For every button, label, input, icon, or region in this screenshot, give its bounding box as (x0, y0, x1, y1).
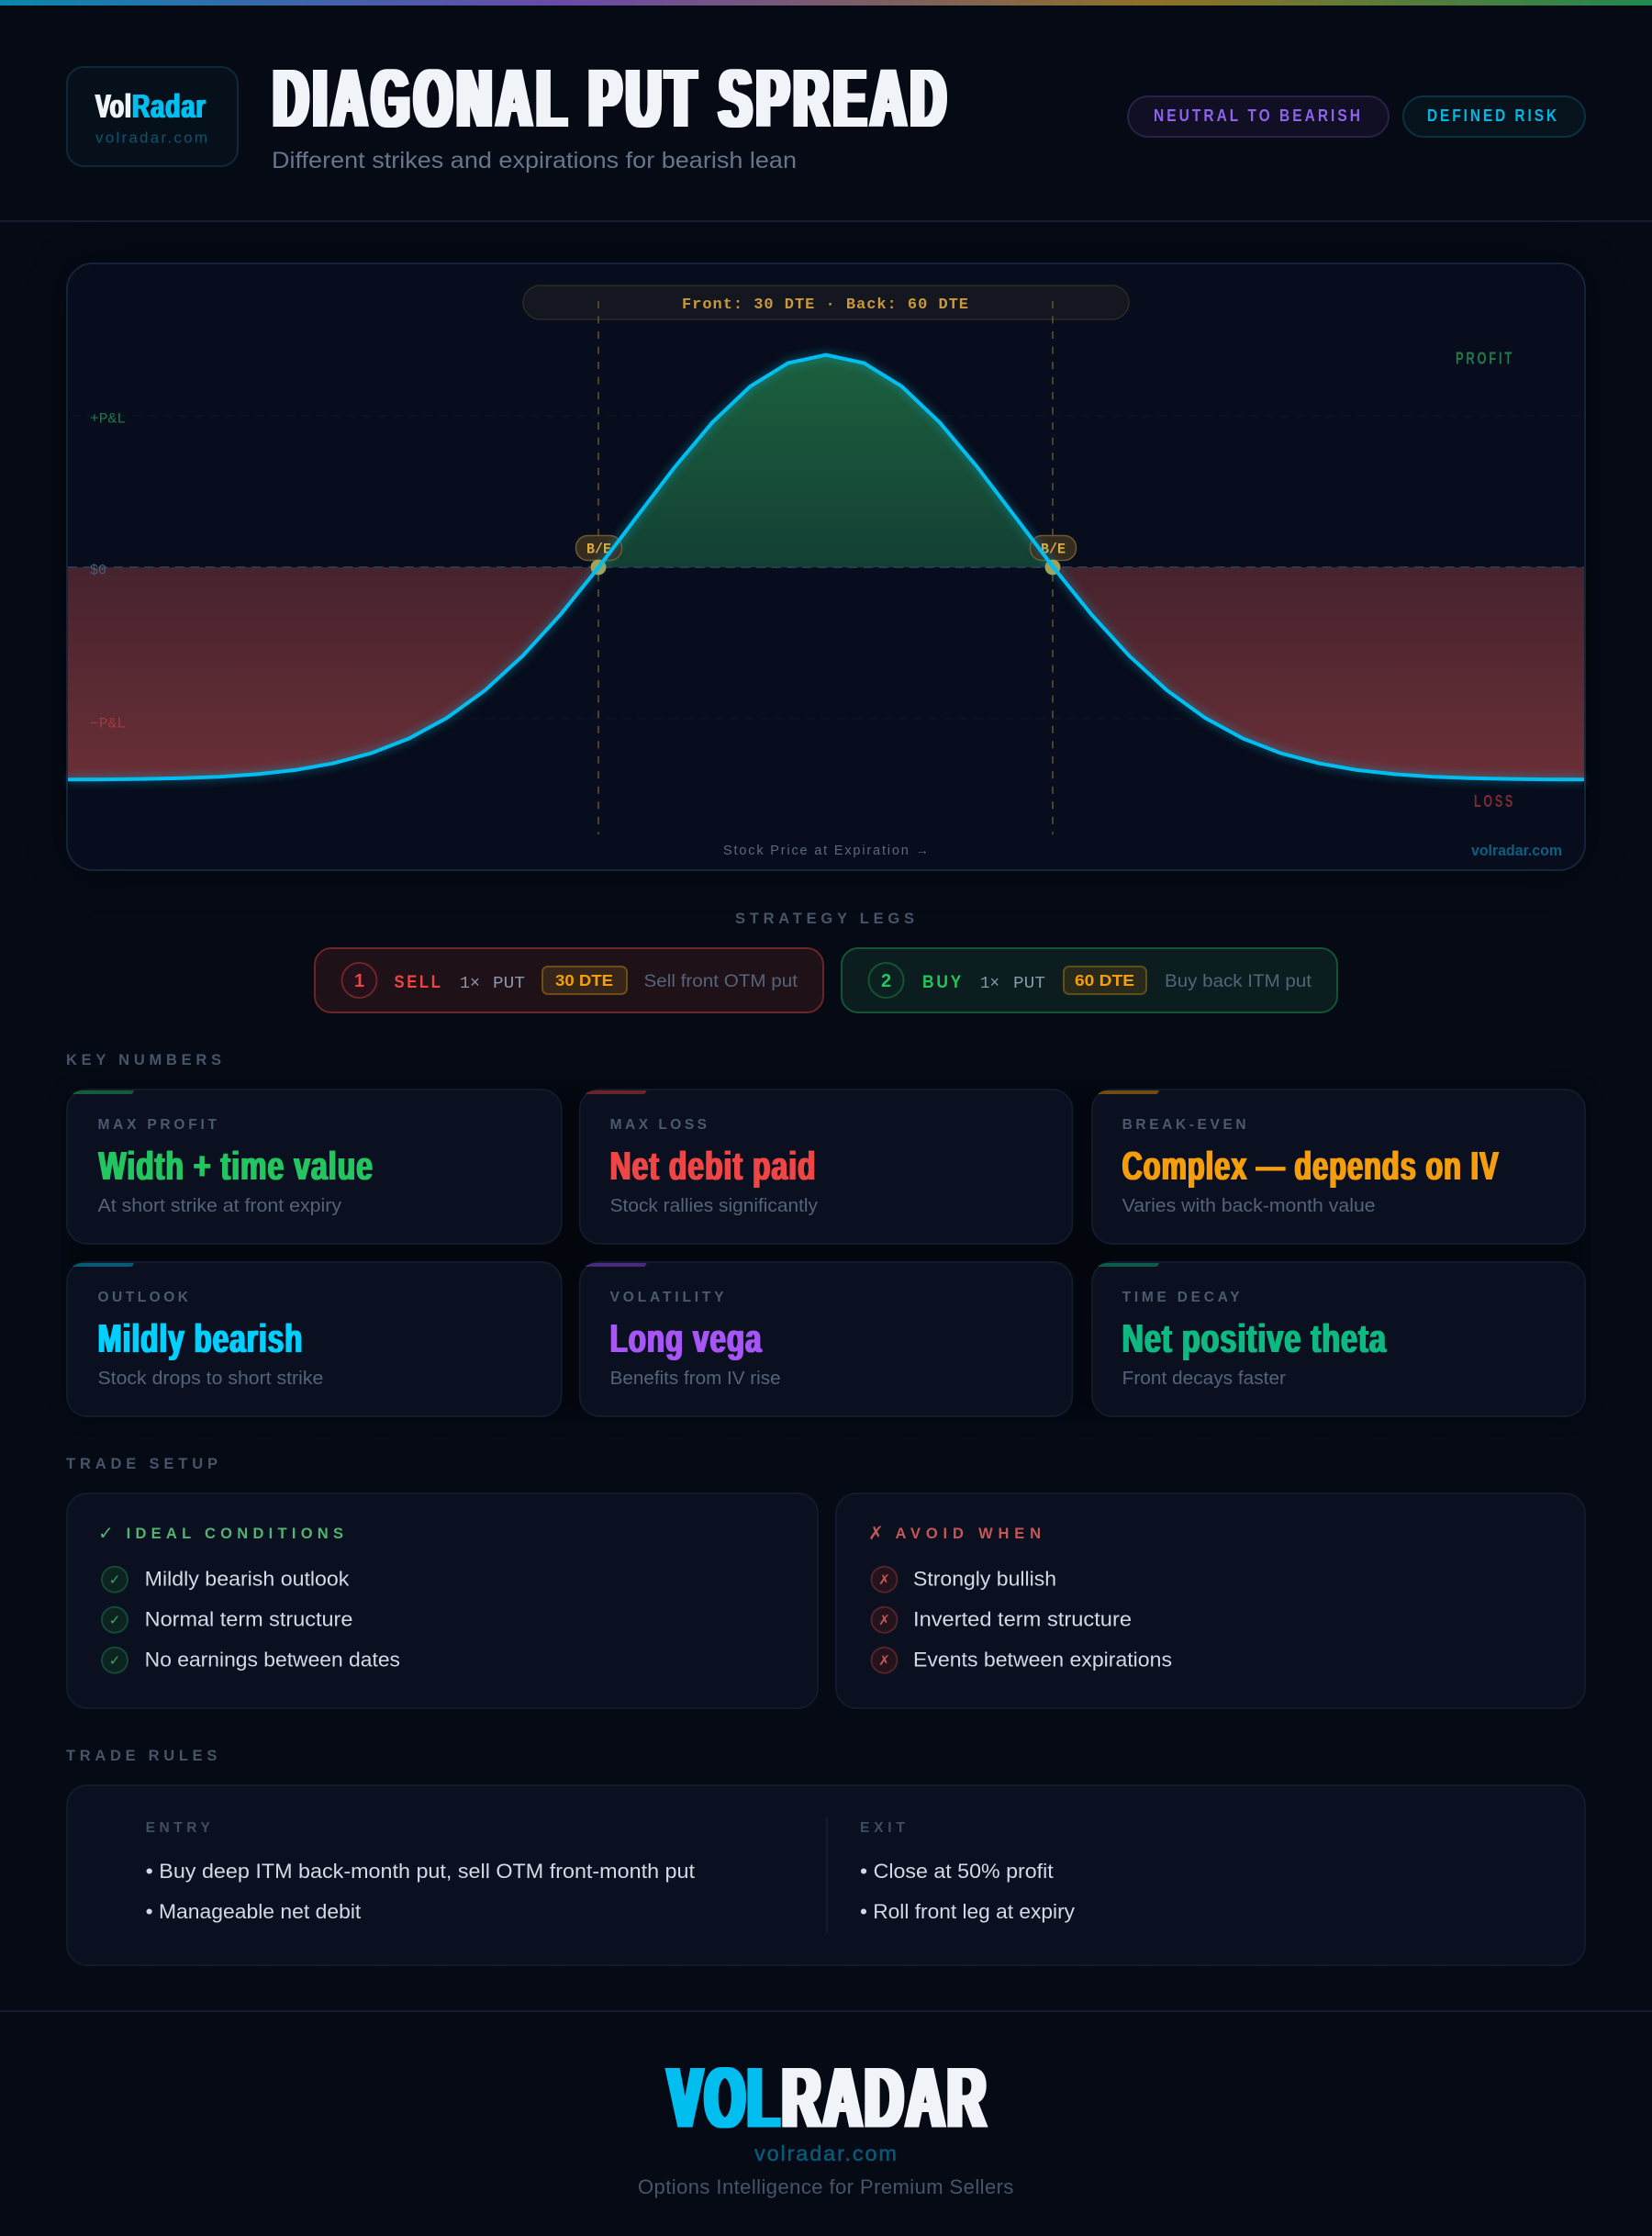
loss label: LOSS (1474, 791, 1515, 811)
DTE badge (1064, 967, 1146, 994)
logo box (67, 67, 238, 166)
label: MAX PROFIT (97, 1117, 218, 1133)
badge: neutral to bearish (1128, 96, 1389, 137)
leg note: Buy back ITM put (1165, 972, 1312, 991)
panel heading (868, 1522, 1041, 1544)
badge: neutral to bearish: NEUTRAL TO BEARISH (1154, 106, 1363, 125)
leg 1: sell (315, 948, 823, 1012)
logo box: Radar (132, 87, 206, 125)
panel heading: AVOID WHEN (896, 1526, 1041, 1542)
value: Net debit paid (610, 1145, 817, 1189)
entry rules: • Manageable net debit (146, 1900, 361, 1923)
break-even label left: B/E (586, 542, 611, 558)
DTE badge (542, 967, 627, 994)
panel: avoid when (836, 1493, 1585, 1708)
DTE badge: 30 DTE (555, 971, 613, 989)
exit rules: • Roll front leg at expiry (860, 1900, 1075, 1923)
note: Benefits from IV rise (610, 1369, 781, 1389)
note: At short strike at front expiry (97, 1196, 341, 1216)
chart watermark: volradar.com (1471, 843, 1562, 859)
label: VOLATILITY (610, 1290, 724, 1305)
panel: trade rules (67, 1785, 1585, 1965)
card: time decay (1092, 1262, 1585, 1416)
exit rules (860, 1820, 1075, 1923)
badge: defined risk (1403, 96, 1585, 137)
heading: trade rules: TRADE RULES (66, 1748, 217, 1764)
logo box: Vol (95, 87, 132, 125)
label: TIME DECAY (1122, 1290, 1240, 1305)
axis label: negative P&L: −P&L (90, 716, 126, 732)
panel: ideal conditions (67, 1493, 818, 1708)
quantity and type (460, 974, 525, 993)
card: break-even (1092, 1090, 1585, 1244)
value: Width + time value (99, 1145, 374, 1189)
subtitle: Different strikes and expirations for bearish lean (272, 148, 797, 173)
item: events between expirations: Events between expirations (913, 1649, 1172, 1671)
note: Varies with back-month value (1122, 1196, 1376, 1216)
exit rules: • Close at 50% profit (860, 1860, 1054, 1883)
item: no earnings between dates: No earnings between dates (145, 1649, 400, 1671)
profit area (598, 355, 1054, 567)
footer url: volradar.com (754, 2141, 897, 2165)
item: mildly bearish outlook: ✓ (109, 1571, 120, 1588)
item: inverted term structure: Inverted term structure (913, 1608, 1132, 1630)
item: strongly bullish: Strongly bullish (913, 1568, 1056, 1590)
axis label: positive P&L: +P&L (90, 411, 126, 428)
card: max loss (580, 1090, 1072, 1244)
loss area left (68, 567, 598, 779)
heading: trade setup: TRADE SETUP (66, 1456, 218, 1472)
item: normal term structure: ✓ (109, 1612, 120, 1628)
item: events between expirations: ✗ (878, 1652, 890, 1669)
value: Mildly bearish (97, 1317, 303, 1361)
footer tagline: Options Intelligence for Premium Sellers (638, 2175, 1013, 2198)
item: inverted term structure: ✗ (878, 1612, 890, 1628)
item: strongly bullish (872, 1567, 1056, 1593)
zero line (68, 566, 1584, 568)
panel: payoff chart (67, 263, 1585, 870)
panel heading: ✗ (868, 1522, 884, 1544)
break-even dot right (1045, 560, 1060, 575)
heading: key numbers: KEY NUMBERS (66, 1052, 221, 1068)
label: OUTLOOK (97, 1290, 189, 1305)
item: strongly bullish: ✗ (878, 1571, 890, 1588)
item: normal term structure: Normal term structure (145, 1608, 352, 1630)
leg number: 2 (881, 971, 891, 991)
quantity and type (980, 974, 1045, 993)
x axis label: Stock Price at Expiration → (723, 844, 929, 858)
footer logo: VOL (668, 2049, 782, 2146)
heading: strategy legs: STRATEGY LEGS (735, 911, 914, 927)
value: Complex — depends on IV (1122, 1145, 1500, 1189)
note: Front decays faster (1122, 1369, 1286, 1389)
DTE badge: 60 DTE (1075, 971, 1134, 989)
quantity and type: PUT (493, 974, 525, 993)
item: mildly bearish outlook: Mildly bearish outlook (145, 1568, 350, 1590)
card: outlook (67, 1262, 562, 1416)
loss area right (1054, 567, 1584, 779)
profit label: PROFIT (1456, 349, 1514, 367)
value: Net positive theta (1122, 1317, 1387, 1361)
entry rules: ENTRY (146, 1820, 210, 1836)
leg number (341, 963, 376, 998)
badge: defined risk: DEFINED RISK (1427, 106, 1559, 125)
top gradient bar (0, 0, 1652, 6)
break-even guide lines (598, 301, 1053, 834)
leg note: Sell front OTM put (644, 972, 798, 991)
item: inverted term structure (872, 1607, 1132, 1633)
break-even label right (1030, 536, 1076, 560)
leg number: 1 (354, 971, 364, 991)
item: mildly bearish outlook (102, 1567, 350, 1593)
panel heading (98, 1522, 343, 1544)
item: no earnings between dates: ✓ (109, 1652, 120, 1669)
axis label: zero: $0 (90, 562, 106, 578)
action: BUY (922, 973, 964, 992)
payoff curve (68, 355, 1584, 779)
panel heading: IDEAL CONDITIONS (127, 1526, 343, 1542)
break-even label right: B/E (1041, 542, 1066, 558)
leg 2: buy (842, 948, 1337, 1012)
value: Long vega (610, 1317, 763, 1361)
expiry pill: Front: 30 DTE · Back: 60 DTE (682, 296, 968, 314)
label: MAX LOSS (610, 1117, 707, 1133)
label: BREAK-EVEN (1122, 1117, 1246, 1133)
footer (638, 2049, 1013, 2198)
quantity and type: 1× (980, 974, 999, 993)
quantity and type: 1× (460, 974, 480, 993)
entry rules (146, 1820, 695, 1923)
exit rules: EXIT (860, 1820, 905, 1836)
footer logo (668, 2049, 989, 2146)
panel heading: ✓ (98, 1522, 114, 1544)
header (67, 53, 1585, 173)
footer logo: RADAR (782, 2049, 989, 2146)
card: max profit (67, 1090, 562, 1244)
note: Stock drops to short strike (97, 1369, 323, 1389)
action: SELL (395, 973, 442, 992)
title: DIAGONAL PUT SPREAD (273, 53, 951, 145)
note: Stock rallies significantly (610, 1196, 818, 1216)
quantity and type: PUT (1013, 974, 1045, 993)
leg number (868, 963, 903, 998)
item: normal term structure (102, 1607, 352, 1633)
break-even label left (576, 536, 622, 560)
expiry pill (523, 285, 1129, 319)
logo box: volradar.com (95, 129, 207, 147)
entry rules: • Buy deep ITM back-month put, sell OTM front-month put (146, 1860, 695, 1883)
break-even dot left (591, 560, 606, 575)
card: volatility (580, 1262, 1072, 1416)
